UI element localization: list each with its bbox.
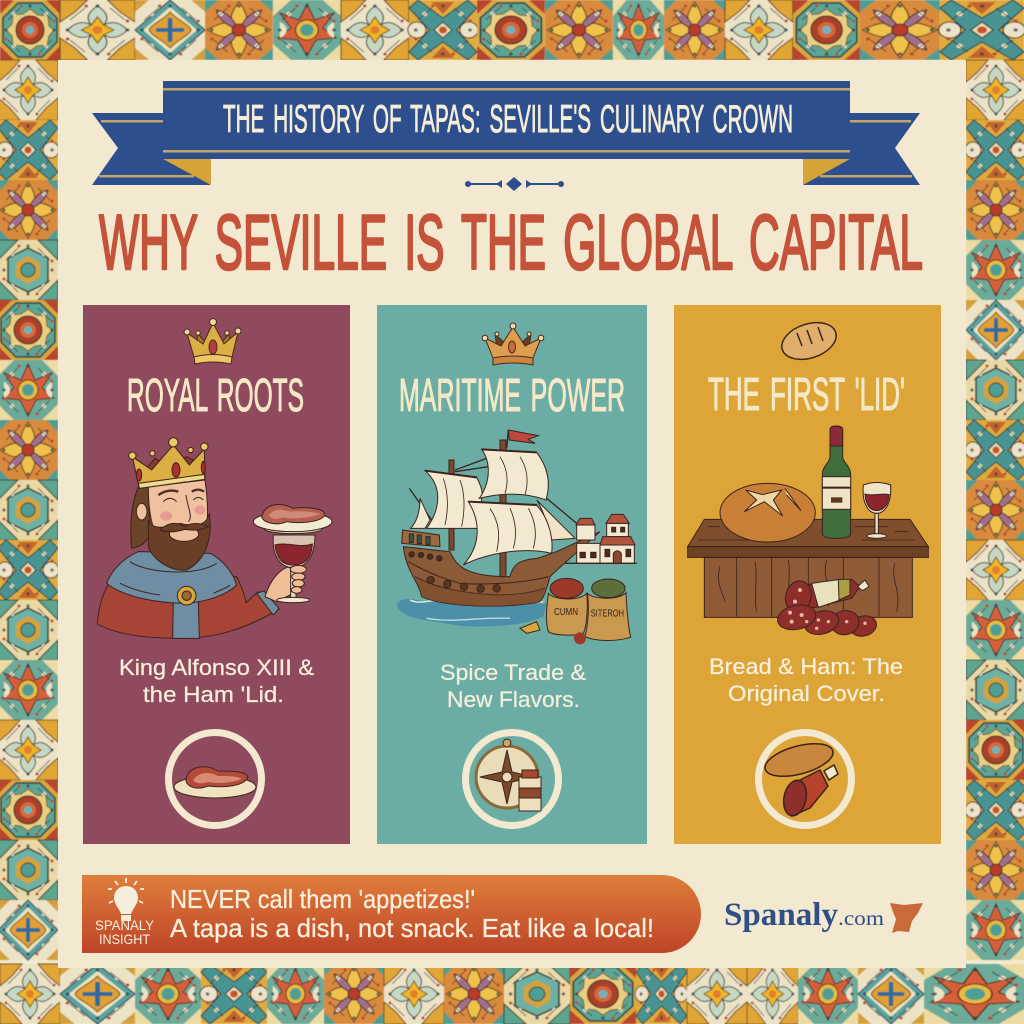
- icon: map of Spain: [890, 903, 923, 933]
- caption: royal roots: King Alfonso XIII &: [119, 655, 314, 680]
- icon: small ornate crown: [482, 323, 544, 365]
- heading: royal roots: ROYAL ROOTS: [127, 369, 304, 421]
- logo: spanaly.com: Spanaly: [724, 897, 838, 933]
- caption: the first lid: [709, 654, 903, 706]
- icon: small crown: [184, 318, 241, 364]
- illustration: galleon, houses and spice sacks: [397, 430, 637, 644]
- caption: royal roots: [119, 655, 314, 707]
- right ribbon tail: [803, 113, 920, 185]
- caption: the first lid: Bread & Ham: The: [709, 654, 903, 679]
- panel: royal roots: [83, 305, 350, 844]
- illustration: galleon, houses and spice sacks: CUMN: [554, 607, 578, 618]
- callout text: NEVER call them 'appetizes!': [170, 884, 475, 914]
- illustration: galleon, houses and spice sacks: SITEROH: [591, 609, 624, 620]
- caption: maritime power: Spice Trade &: [440, 660, 586, 685]
- logo: spanaly.com: [724, 897, 923, 933]
- icon: bread and salami: [758, 732, 852, 826]
- illustration: table with bread, wine and salami: [688, 426, 928, 639]
- ornamental divider: [465, 177, 564, 191]
- icon: compass and spice jar: [466, 732, 558, 826]
- label: spanaly insight: INSIGHT: [99, 931, 150, 947]
- icon: lightbulb: [108, 878, 144, 921]
- caption: royal roots: the Ham 'Lid.: [143, 682, 284, 707]
- ribbon banner: [92, 81, 920, 185]
- main ribbon: [163, 81, 850, 159]
- caption: maritime power: [440, 660, 586, 712]
- label: spanaly insight: [95, 917, 155, 947]
- logo: spanaly.com: .com: [838, 906, 884, 930]
- heading: maritime power: MARITIME POWER: [399, 369, 625, 421]
- label: spanaly insight: SPANALY: [95, 917, 155, 933]
- icon: ham on plate: [168, 732, 262, 826]
- callout: spanaly insight: [82, 875, 701, 953]
- caption: maritime power: New Flavors.: [447, 687, 580, 712]
- cream paper panel: [58, 60, 966, 968]
- panel: the first lid: [674, 305, 941, 844]
- icon: bread loaf: [777, 316, 841, 366]
- panel: maritime power: [377, 305, 647, 844]
- left ribbon tail: [92, 113, 211, 185]
- callout text: A tapa is a dish, not snack. Eat like a local!: [170, 913, 654, 943]
- illustration: king with ham and wine: [97, 438, 332, 638]
- caption: the first lid: Original Cover.: [728, 681, 885, 706]
- callout text: [170, 884, 654, 943]
